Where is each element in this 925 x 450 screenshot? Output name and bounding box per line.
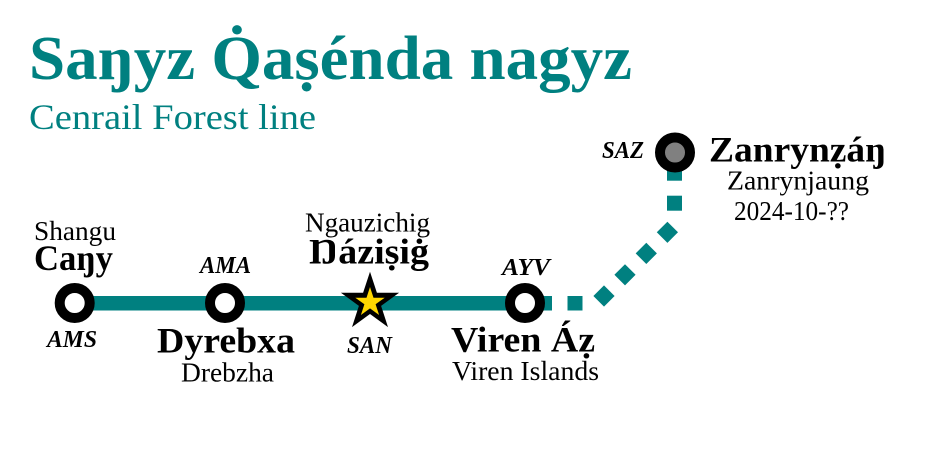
station: Ŋáziṣiġ: Ŋáziṣiġ — [309, 232, 429, 272]
station: Viren Áẓ — [451, 255, 599, 386]
station: Dyrebxa: Drebzha — [181, 358, 274, 388]
subtitle: Cenrail Forest line — [29, 97, 316, 137]
station: Viren Áẓ: Viren Islands — [452, 356, 599, 386]
station: Caŋy: AMS — [45, 327, 97, 353]
solid line segment — [75, 296, 525, 310]
station: Zanrynẓáŋ (planned) — [602, 130, 886, 226]
station: Zanrynẓáŋ (planned): SAZ — [602, 138, 644, 164]
station: Ŋáziṣiġ: SAN — [347, 333, 394, 359]
station: Caŋy — [34, 216, 117, 353]
station: Caŋy: Shangu — [34, 216, 117, 246]
station: Ŋáziṣiġ: Ngauzichig — [305, 208, 430, 238]
planned dashed line extension — [537, 165, 682, 310]
icon: interchange star — [341, 272, 399, 327]
station: Viren Áẓ: Viren Áẓ — [451, 320, 595, 360]
station: Viren Áẓ: AYV — [500, 255, 552, 281]
station: Zanrynẓáŋ (planned): Zanrynẓáŋ — [709, 130, 886, 170]
station: Dyrebxa — [157, 253, 295, 388]
station: Dyrebxa: Dyrebxa — [157, 321, 295, 361]
station: Zanrynẓáŋ (planned): 2024-10-?? — [734, 196, 849, 226]
title: Saŋyz Q̇aṣénda nagyz — [29, 25, 632, 93]
station: Dyrebxa: AMA — [198, 253, 251, 279]
station: Zanrynẓáŋ (planned): Zanrynjaung — [727, 165, 869, 195]
station: Caŋy: Caŋy — [34, 238, 113, 278]
station: Ŋáziṣiġ — [305, 208, 430, 359]
